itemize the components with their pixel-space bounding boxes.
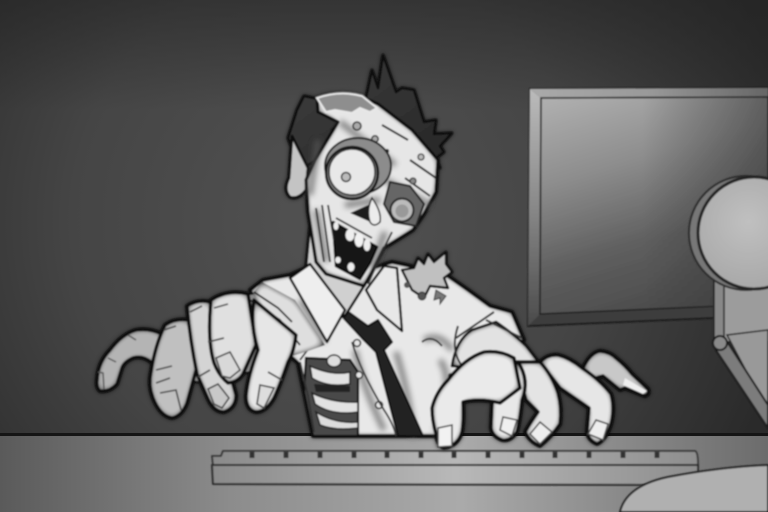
- middle finger: [187, 301, 236, 412]
- ring finger: [150, 320, 203, 418]
- left hand: [97, 282, 325, 418]
- thumb: [246, 300, 296, 412]
- mouse on the desk: [620, 465, 768, 512]
- pinky: [97, 330, 170, 391]
- left arm sleeve: [247, 282, 325, 356]
- zombie figure: [97, 55, 649, 448]
- body: torn shirt: [250, 252, 524, 436]
- neck: [305, 225, 364, 316]
- computer monitor on the back wall: [528, 88, 768, 326]
- shirt shading: [300, 300, 452, 436]
- pinky: [583, 351, 649, 396]
- zombie head: [306, 93, 438, 286]
- shirt folds: [300, 339, 442, 436]
- fourth finger: [540, 355, 613, 444]
- forearm with rolled sleeve: [452, 312, 540, 372]
- shirt buttons: [354, 340, 382, 408]
- second finger: [491, 362, 525, 440]
- open mouth with teeth: [333, 222, 377, 279]
- small sunken eye: [384, 182, 424, 226]
- round desk lamp mirror on stand: [689, 176, 768, 428]
- big bulging eye: [325, 138, 391, 199]
- thumb: [432, 352, 520, 448]
- third finger: [516, 362, 561, 446]
- face shading: [310, 122, 430, 268]
- right hand: [432, 312, 649, 448]
- face cracks: [316, 205, 392, 284]
- necktie: [338, 308, 423, 436]
- hair: [288, 55, 452, 170]
- shirt collar: [290, 264, 402, 342]
- exposed ribs: [304, 355, 358, 436]
- keyboard: [212, 451, 698, 485]
- nose hole: [352, 205, 370, 221]
- forehead scars: [382, 125, 436, 196]
- exposed brain patch: [317, 93, 377, 113]
- desk surface: [0, 433, 768, 512]
- ear: [286, 136, 308, 198]
- index finger: [208, 292, 256, 383]
